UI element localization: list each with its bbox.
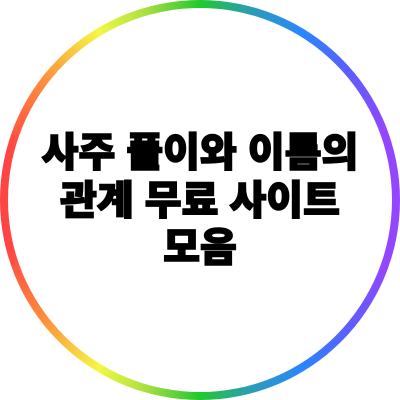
title: 모음 — [163, 226, 237, 270]
title — [41, 131, 358, 270]
title: 사주 풀이와 이름의 — [42, 131, 358, 175]
title: 관계 무료 사이트 — [60, 178, 340, 222]
